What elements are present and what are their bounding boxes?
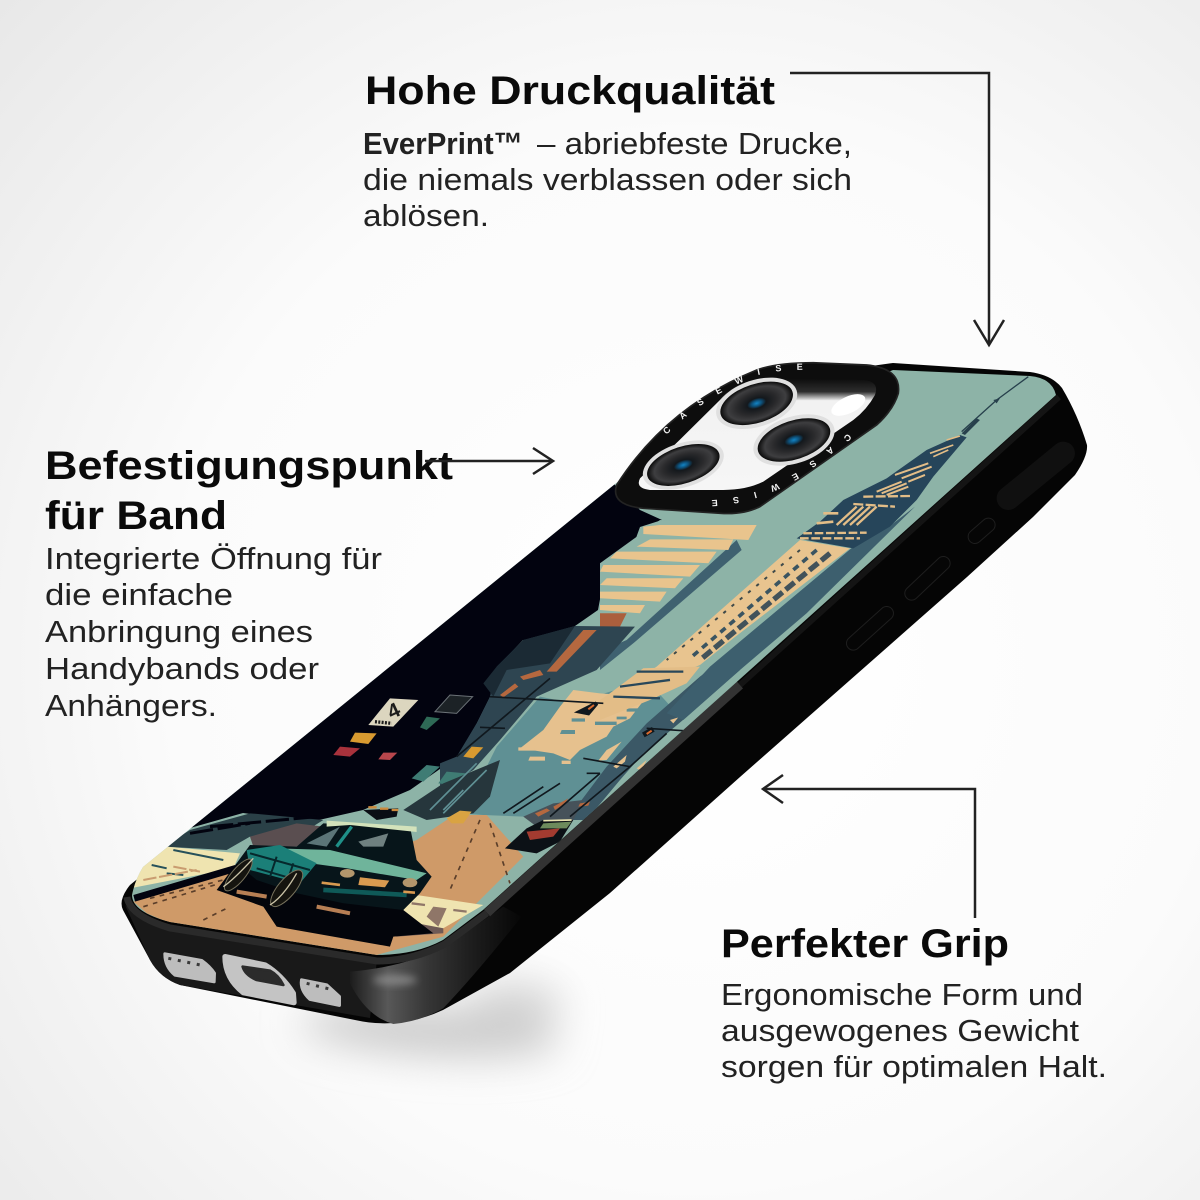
text: print quality description bbox=[363, 126, 852, 233]
heading: grip: Perfekter Grip bbox=[721, 922, 1009, 966]
lens right bbox=[747, 405, 841, 475]
lens top bbox=[710, 368, 804, 438]
skyscraper windows bbox=[690, 550, 817, 658]
callout: print quality bbox=[363, 69, 852, 233]
lens highlight bbox=[828, 390, 868, 420]
car body bbox=[237, 823, 432, 910]
hazy teal street bbox=[470, 690, 668, 817]
sidewalk shade bbox=[163, 813, 323, 850]
text: grip description: ausgewogenes Gewicht bbox=[721, 1013, 1079, 1048]
car hood bbox=[277, 848, 427, 880]
bumper glare bbox=[373, 975, 417, 985]
case rim bbox=[127, 397, 1059, 961]
arrow: grip bbox=[763, 775, 975, 918]
skyscraper shadow side bbox=[667, 507, 915, 720]
cream sidewalk bbox=[130, 847, 240, 888]
callout: strap attachment bbox=[45, 444, 453, 723]
lens left bbox=[637, 431, 730, 499]
spire bbox=[962, 377, 1028, 432]
text: strap attachment description: Handybands oder bbox=[45, 651, 319, 686]
orange brick strip bbox=[500, 630, 597, 697]
street signs bbox=[368, 698, 418, 727]
bumper highlight bbox=[350, 907, 522, 1024]
road curb bbox=[133, 865, 237, 902]
tan haze bbox=[520, 690, 647, 760]
car roof bbox=[327, 821, 417, 832]
car windows bbox=[307, 827, 340, 847]
casewise lettering: CASEWISE bbox=[712, 434, 851, 506]
strap slot bbox=[1008, 453, 1063, 498]
side buttons and strap slot bbox=[853, 453, 1063, 643]
left speaker bbox=[165, 954, 214, 982]
text: print quality description: ablösen. bbox=[363, 198, 489, 233]
car bbox=[217, 821, 433, 947]
text: strap attachment description bbox=[45, 541, 382, 723]
artwork back panel bbox=[132, 370, 1056, 955]
camera ring bbox=[616, 363, 899, 514]
text: print quality description: die niemals verblassen oder sich bbox=[363, 162, 852, 197]
slate block right bbox=[573, 670, 740, 820]
text: grip description: sorgen für optimalen Halt. bbox=[721, 1049, 1107, 1084]
camera glass bbox=[639, 378, 876, 490]
charging ports bbox=[165, 954, 339, 1005]
car side bbox=[247, 845, 317, 883]
casewise lettering bbox=[664, 364, 851, 506]
slate buildings band bbox=[440, 626, 635, 790]
phone case body bbox=[122, 363, 1087, 1023]
skyscraper bbox=[600, 377, 1028, 720]
usb port bbox=[225, 957, 294, 1003]
upper volume button bbox=[912, 563, 943, 593]
crosswalk bbox=[396, 894, 444, 937]
distant taxi bbox=[447, 811, 472, 823]
crown details bbox=[800, 436, 960, 538]
street level haze and buildings bbox=[440, 626, 740, 827]
heading: strap attachment: Befestigungspunkt bbox=[45, 444, 453, 488]
road marks bbox=[143, 820, 510, 920]
lower volume button bbox=[853, 613, 887, 643]
road bbox=[133, 815, 523, 955]
callout: grip bbox=[721, 922, 1107, 1084]
dark street buildings bbox=[403, 760, 500, 820]
camera module bbox=[614, 362, 900, 514]
striped building bbox=[600, 520, 757, 670]
bottom face bbox=[125, 905, 377, 1018]
casewise lettering: CASEWISE bbox=[664, 364, 802, 434]
text: print quality description: – abriebfeste Drucke, bbox=[537, 126, 852, 161]
text: print quality description: EverPrint™ bbox=[363, 126, 523, 161]
heading: print quality: Hohe Druckqualität bbox=[365, 69, 775, 113]
traffic poles and lights bbox=[447, 678, 683, 817]
dark city shadow bbox=[191, 484, 662, 828]
lower buildings bbox=[523, 800, 583, 827]
text: strap attachment description: die einfache bbox=[45, 577, 233, 612]
skyscraper crown bbox=[797, 435, 967, 548]
phone shadow bbox=[299, 983, 563, 1065]
text: grip description bbox=[721, 977, 1107, 1084]
text: grip description: Ergonomische Form und bbox=[721, 977, 1083, 1012]
sky bbox=[132, 370, 1056, 955]
skyscraper body bbox=[654, 540, 850, 668]
street scene: 4 bbox=[384, 698, 404, 724]
text: strap attachment description: Anbringung eines bbox=[45, 614, 313, 649]
phone bbox=[122, 362, 1088, 1024]
red car bbox=[505, 820, 573, 853]
arrow: strap attachment bbox=[425, 448, 553, 474]
car shadow bbox=[217, 857, 433, 947]
skyscraper lower section bbox=[609, 666, 700, 710]
text: strap attachment description: Integrierte Öffnung für bbox=[45, 541, 382, 576]
street scene bbox=[130, 695, 573, 955]
arrow: print quality bbox=[790, 73, 1004, 345]
car wheels bbox=[265, 865, 308, 911]
text: strap attachment description: Anhängers. bbox=[45, 688, 217, 723]
car front bbox=[323, 890, 407, 895]
right speaker bbox=[301, 980, 339, 1005]
heading: strap attachment bbox=[45, 444, 453, 538]
action button bbox=[975, 525, 988, 537]
heading: strap attachment: für Band bbox=[45, 494, 227, 538]
